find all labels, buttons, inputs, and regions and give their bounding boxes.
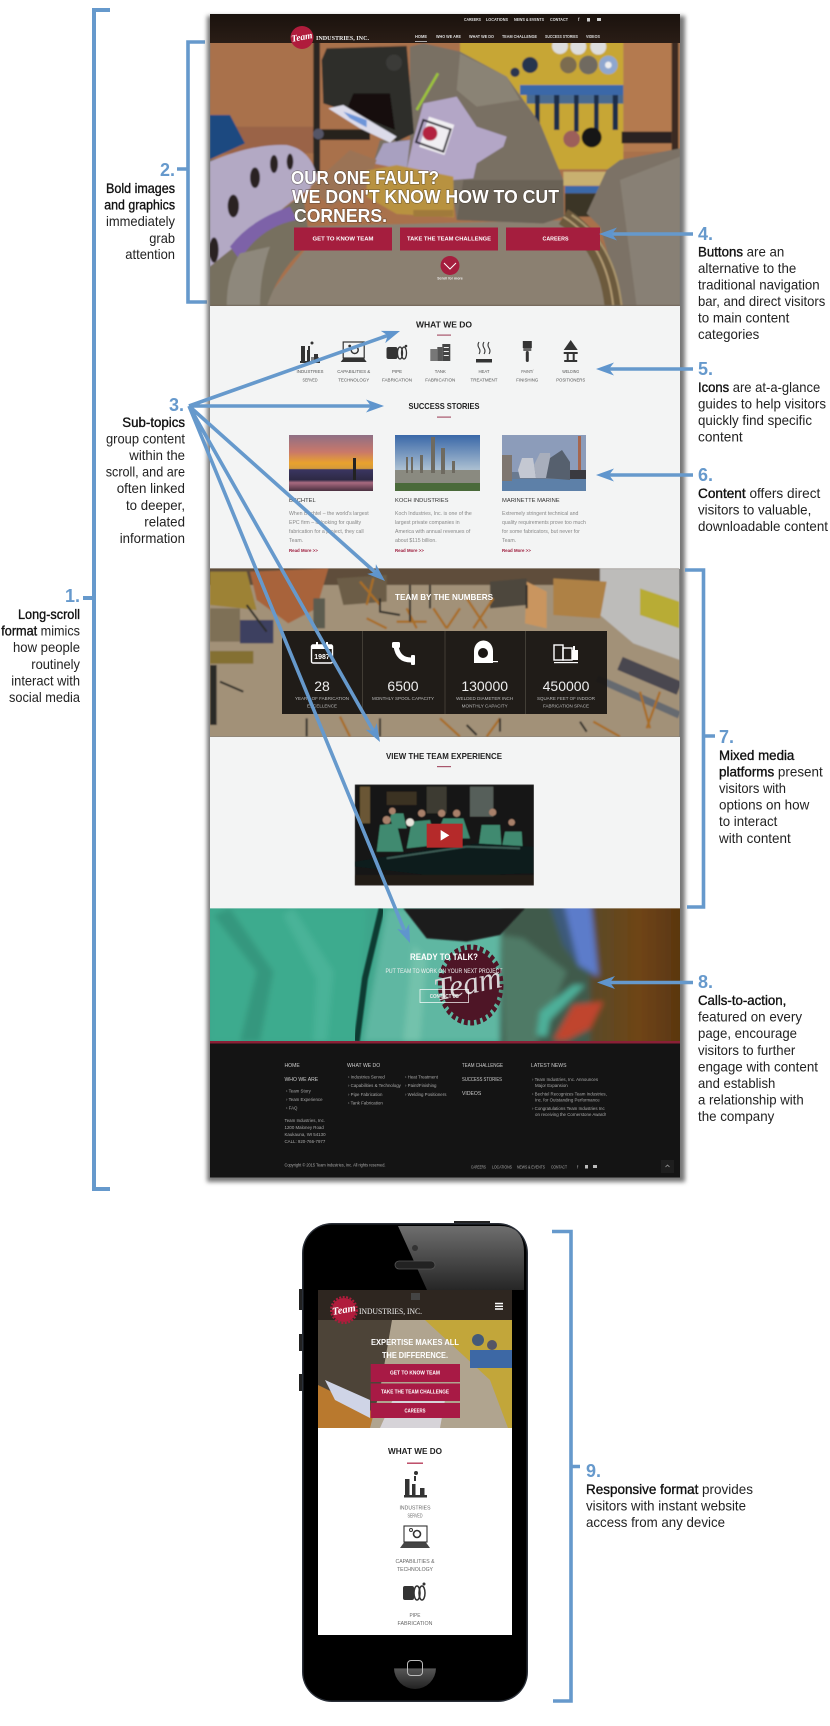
annotation 6: content: Content offers direct [698, 486, 821, 501]
story: Marinette [502, 435, 586, 553]
stats box: 6500 [387, 678, 419, 694]
mobile buttons: GET TO KNOW TEAM [390, 1370, 440, 1376]
footer column 2: › Industries Served [348, 1074, 385, 1080]
mobile hero photo [318, 1320, 512, 1428]
logo: INDUSTRIES, INC. [316, 36, 370, 42]
mobile header: Team [332, 1303, 357, 1318]
top utility nav: CAREERS [464, 17, 481, 22]
arrow 4 [599, 228, 693, 240]
footer column 2 [347, 1063, 447, 1106]
story: Bechtel: When Bechtel – the world's largest [289, 511, 369, 517]
icon labels: SERVED [302, 378, 318, 384]
footer column 2: › Tank Fabrication [348, 1100, 383, 1106]
annotation 5: icons: Icons are at-a-glance [698, 380, 820, 395]
annotation 5: icons: 5. [698, 359, 713, 379]
annotation 2: bold images: grab [149, 231, 175, 246]
annotation 6: content: visitors to valuable, [698, 502, 811, 518]
annotation 9: responsive: access from any device [586, 1515, 725, 1530]
icon labels: FINISHING [516, 378, 538, 384]
annotation 7: mixed media: with content [718, 831, 791, 846]
phone side buttons [299, 1221, 490, 1391]
panel: site header [210, 14, 680, 49]
mobile buttons: TAKE THE TEAM CHALLENGE [381, 1390, 449, 1396]
panel: team experience video [210, 737, 680, 909]
top utility nav: LOCATIONS [486, 17, 508, 22]
photo: ships [502, 435, 586, 491]
main nav: WHO WE ARE [436, 34, 461, 39]
icon labels: TECHNOLOGY [338, 378, 370, 384]
mobile headline: THE DIFFERENCE. [382, 1351, 448, 1360]
icon labels [296, 369, 586, 384]
annotation 8: calls to action: the company [698, 1109, 774, 1124]
heading: success stories: SUCCESS STORIES [408, 401, 480, 411]
heading: view the team experience: VIEW THE TEAM EXPERIENCE [386, 751, 502, 761]
annotation 4: buttons: traditional navigation [698, 278, 820, 292]
bracket 9: responsive [552, 1232, 580, 1701]
footer bottom bar: LOCATIONS [492, 1164, 512, 1170]
footer bottom bar: CONTACT [551, 1164, 567, 1170]
stats box: EXCELLENCE [307, 704, 337, 708]
annotation 5: icons: content [698, 430, 743, 444]
footer bottom bar: NEWS & EVENTS [517, 1164, 545, 1170]
annotation 7: mixed media: to interact [719, 814, 778, 829]
icon: industries [300, 342, 320, 363]
annotation 3: sub-topics: group content [106, 432, 185, 446]
footer bottom bar: f [577, 1164, 579, 1170]
icon: tape measure [474, 640, 498, 663]
footer column 2: › Pipe Fabrication [348, 1092, 383, 1097]
mobile label: pipe [398, 1613, 432, 1627]
heading: view the team experience [386, 751, 502, 767]
phone screen [318, 1290, 512, 1635]
story: Koch: about $115 billion. [395, 538, 437, 544]
icon labels: PIPE [392, 369, 403, 375]
mobile heading: what we do [388, 1446, 442, 1464]
annotation 4: buttons: bar, and direct visitors [698, 294, 825, 309]
stats box: MONTHLY CAPACITY [462, 704, 508, 708]
icon: brush [523, 341, 532, 362]
annotation 3: sub-topics: related [144, 514, 185, 530]
icon: elbow pipe [392, 642, 415, 665]
annotation 2: bold images: Bold images [106, 181, 175, 196]
arrow 8 [597, 976, 693, 989]
hero headline: CORNERS. [294, 205, 387, 226]
cta button: CONTACT US [430, 994, 459, 1000]
icon labels: PAINT/ [521, 369, 534, 375]
mobile label: pipe: PIPE [410, 1613, 421, 1619]
story: Bechtel: EPC firm – is looking for quality [289, 520, 361, 526]
annotation 1: long-scroll: social media [9, 690, 80, 705]
annotation 2: bold images [104, 160, 175, 262]
footer column 2: › Heat Treatment [405, 1074, 439, 1080]
main nav [415, 34, 600, 42]
top utility nav: f [578, 17, 580, 22]
scroll indicator: Scroll for more [437, 276, 463, 280]
annotation 4: buttons: 4. [698, 224, 713, 244]
footer column 1: HOME [284, 1063, 300, 1069]
footer column 1: WHO WE ARE [284, 1077, 319, 1083]
stats box: 130000 [461, 678, 508, 694]
arrow 6 [596, 468, 693, 482]
annotation 5: icons: guides to help visitors [698, 396, 826, 412]
annotation 6: content: 6. [698, 465, 713, 485]
story: Marinette: Extremely stringent technical and [502, 511, 579, 517]
annotation 8: calls to action: a relationship with [698, 1092, 804, 1108]
hero buttons [294, 228, 600, 250]
mobile icon: pipe [403, 1582, 426, 1600]
footer latest news: Major Expansion [535, 1083, 568, 1088]
heading: success stories [408, 401, 480, 418]
footer column 3: VIDEOS [462, 1091, 482, 1097]
footer column 2: › Paint/Finishing [405, 1083, 437, 1088]
annotation 4: buttons [698, 224, 825, 342]
annotation 7: mixed media [718, 727, 823, 846]
annotation 6: content: downloadable content [698, 519, 828, 534]
annotation 8: calls to action [698, 972, 818, 1124]
icon labels: FABRICATION [382, 378, 412, 384]
story: Bechtel: fabrication for a project, they call [289, 529, 364, 535]
annotation 4: buttons: categories [698, 327, 759, 342]
main nav: WHAT WE DO [469, 34, 494, 39]
photo: sunset [289, 435, 373, 491]
icon labels: HEAT [478, 369, 490, 375]
annotation 6: content [698, 465, 828, 534]
bracket 7: mixed media [685, 570, 715, 907]
mobile label: capabilities: TECHNOLOGY [397, 1567, 433, 1573]
annotation 3: sub-topics [106, 395, 185, 546]
hero buttons: TAKE THE TEAM CHALLENGE [407, 236, 491, 242]
annotation 7: mixed media: visitors with [719, 781, 786, 796]
annotation 8: calls to action: featured on every [698, 1010, 802, 1024]
main nav: HOME [415, 34, 427, 39]
annotation 9: responsive [586, 1461, 753, 1530]
icon: calendar: 1987 [314, 654, 330, 661]
annotation 2: bold images: and graphics [104, 198, 175, 212]
footer column 1: › Team Experience [286, 1097, 323, 1102]
seal: Team starburst [431, 948, 505, 1022]
logo: Team [291, 31, 313, 45]
annotation 5: icons: quickly find specific [698, 413, 812, 428]
heading: what we do: WHAT WE DO [416, 320, 472, 330]
icon labels: TANK [435, 369, 446, 375]
cta button [420, 990, 468, 1002]
story: Bechtel: Read More >> [289, 548, 318, 553]
icon: heat [476, 342, 492, 362]
story: Marinette: MARINETTE MARINE [502, 498, 560, 504]
annotation 2: bold images: 2. [160, 160, 175, 180]
annotation 9: responsive: Responsive format provides [586, 1482, 753, 1497]
footer column 3: TEAM CHALLENGE [462, 1063, 504, 1069]
annotation 2: bold images: attention [125, 247, 175, 262]
hero headline [291, 167, 560, 226]
footer column 2: WHAT WE DO [347, 1063, 380, 1069]
footer column 1: Team Industries, Inc. [284, 1118, 325, 1123]
icon: building [554, 645, 578, 663]
panel: hero photo [209, 38, 680, 307]
mobile headline [371, 1338, 459, 1360]
story: Koch: America with annual revenues of [395, 529, 471, 535]
annotation 1: long-scroll: interact with [11, 674, 80, 688]
icon row [296, 340, 586, 384]
annotation 1: long-scroll: how people [13, 640, 80, 655]
bracket 2: hero [177, 42, 207, 302]
mobile heading: what we do: WHAT WE DO [388, 1446, 442, 1456]
icon: positioner [564, 340, 578, 362]
annotation 8: calls to action: page, encourage [698, 1026, 797, 1041]
annotation 7: mixed media: platforms present [719, 764, 823, 780]
cta text: PUT TEAM TO WORK ON YOUR NEXT PROJECT [386, 969, 503, 975]
footer latest news: › Team Industries, Inc. Announces [532, 1077, 599, 1082]
annotation 1: long-scroll: format mimics [1, 624, 80, 638]
main nav: TEAM CHALLENGE [502, 34, 537, 39]
cta text [386, 952, 503, 975]
scroll indicator [437, 256, 463, 280]
hero buttons: CAREERS [542, 236, 569, 242]
icon labels: INDUSTRIES [296, 369, 324, 375]
top utility nav: NEWS & EVENTS [514, 17, 544, 22]
footer column 2: › Welding Positioners [405, 1092, 447, 1097]
story: Koch: largest private companies in [395, 520, 460, 526]
video thumbnail [355, 784, 534, 886]
footer latest news: › Bechtel Recognizes Team Industries, [532, 1092, 607, 1096]
story: Koch [395, 435, 480, 553]
photo: welder's teal shirt [210, 908, 680, 1041]
story: Bechtel: Team. [289, 538, 303, 544]
mobile buttons [371, 1364, 460, 1418]
stats box [282, 631, 607, 714]
story: Bechtel [289, 435, 373, 553]
annotation 4: buttons: Buttons are an [698, 244, 784, 260]
panel: what we do and success stories [210, 306, 680, 569]
icon: calendar [312, 642, 332, 663]
story: Koch: Read More >> [395, 548, 424, 553]
heading: team by the numbers: TEAM BY THE NUMBERS [395, 593, 494, 602]
annotation 2: bold images: immediately [106, 214, 175, 229]
phone home button [394, 1647, 436, 1689]
cta text: READY TO TALK? [410, 952, 478, 962]
seal: Team starburst: Team [431, 958, 505, 1008]
stats box: YEARS OF FABRICATION [295, 696, 349, 701]
hero buttons: GET TO KNOW TEAM [312, 236, 374, 242]
stats box: SQUARE FEET OF INDOOR [537, 696, 596, 701]
stats box: 28 [314, 678, 330, 694]
footer column 2: › Capabilities & Technology [348, 1083, 402, 1088]
icon: laptop [341, 342, 367, 362]
footer bottom bar: Copyright © 2015 Team Industries, Inc. All rights reserved. [284, 1162, 386, 1168]
play button [427, 824, 463, 848]
annotation 3: sub-topics: to deeper, [126, 498, 185, 513]
story: Marinette: Team. [502, 538, 516, 544]
panel: website mockup [193, 14, 693, 1178]
footer column 1: CALL: 920-766-7977 [284, 1139, 326, 1144]
annotation 7: mixed media: options on how [719, 798, 809, 812]
story: Bechtel: BECHTEL [289, 498, 317, 504]
footer latest news [531, 1063, 607, 1117]
story: Marinette: quality requirements prove too much [502, 520, 586, 526]
annotation 8: calls to action: and establish [698, 1076, 775, 1091]
hero headline: OUR ONE FAULT? [291, 167, 439, 188]
icon labels: TREATMENT [470, 378, 498, 384]
top utility nav: CONTACT [550, 17, 568, 22]
mobile label: pipe: FABRICATION [398, 1621, 432, 1627]
annotation 8: calls to action: 8. [698, 972, 713, 992]
story: Marinette: Read More >> [502, 548, 531, 553]
icon: pipe [386, 345, 407, 359]
footer column 1: › FAQ [286, 1106, 298, 1110]
footer column 1 [284, 1063, 326, 1144]
photo: fabrication shop [207, 565, 683, 742]
annotation 1: long-scroll [1, 586, 80, 705]
page shadow [207, 16, 685, 1182]
footer bottom bar [284, 1160, 674, 1173]
panel: call to action [210, 908, 680, 1041]
footer latest news: LATEST NEWS [531, 1063, 567, 1069]
mobile label: capabilities [396, 1559, 435, 1573]
icon labels: CAPABILITIES & [337, 369, 371, 375]
mobile label: industries: SERVED [408, 1514, 422, 1520]
annotation 8: calls to action: visitors to further [698, 1043, 796, 1058]
logo [290, 26, 370, 49]
annotation 4: buttons: to main content [698, 310, 790, 326]
mobile header: INDUSTRIES, INC. [359, 1307, 422, 1316]
annotation 8: calls to action: Calls-to-action, [698, 993, 786, 1008]
hero headline: WE DON'T KNOW HOW TO CUT [292, 186, 560, 207]
story: Marinette: for some fabricators, but never for [502, 529, 580, 535]
stats box: MONTHLY SPOOL CAPACITY [372, 696, 434, 701]
footer column 1: Kaukauna, WI 54130 [284, 1132, 326, 1137]
footer latest news: › Congratulations Team Industries Inc [532, 1106, 605, 1111]
stats box: WELDED DIAMETER INCH [456, 696, 513, 701]
story: Koch: KOCH INDUSTRIES [395, 498, 449, 504]
story: Koch: Koch Industries, Inc. is one of the [395, 511, 472, 517]
mobile icon: industries [404, 1471, 427, 1498]
annotation 8: calls to action: engage with content [698, 1060, 818, 1074]
annotation 3: sub-topics: information [120, 531, 185, 546]
footer latest news: on receiving the Cornerstone Award! [535, 1112, 606, 1117]
annotation 9: responsive: 9. [586, 1461, 601, 1481]
annotation 5: icons [698, 359, 826, 444]
annotation 7: mixed media: 7. [719, 727, 734, 747]
annotation 9: responsive: visitors with instant website [586, 1498, 746, 1514]
icon: tank [430, 344, 450, 361]
annotation 1: long-scroll: Long-scroll [18, 607, 80, 622]
stats box: FABRICATION SPACE [543, 704, 589, 708]
bracket 1: whole page [83, 10, 110, 1189]
phone speaker and camera [395, 1245, 435, 1269]
phone mockup [299, 1221, 528, 1702]
mobile label: capabilities: CAPABILITIES & [396, 1559, 435, 1565]
mobile label: industries: INDUSTRIES [400, 1506, 431, 1512]
annotation 1: long-scroll: routinely [31, 657, 80, 672]
panel: team by the numbers [207, 565, 683, 742]
annotation 3: sub-topics: 3. [169, 395, 184, 415]
panel: footer [210, 1041, 680, 1178]
mobile buttons: CAREERS [404, 1408, 426, 1414]
top utility nav [464, 17, 601, 22]
footer column 1: › Team Story [286, 1088, 312, 1094]
arrows: sub-topics [189, 325, 416, 945]
annotation 3: sub-topics: Sub-topics [122, 415, 185, 430]
footer column 1: 1200 Maloney Road [284, 1125, 324, 1130]
annotation 3: sub-topics: often linked [117, 481, 185, 496]
footer column 3: SUCCESS STORIES [462, 1077, 502, 1083]
heading: what we do [416, 320, 472, 336]
icon labels: WELDING [562, 369, 579, 375]
stats box: 450000 [543, 678, 590, 694]
annotation 3: sub-topics: within the [128, 448, 185, 463]
photo: refinery [395, 435, 480, 491]
footer bottom bar: CAREERS [471, 1164, 486, 1170]
main nav: SUCCESS STORIES [545, 34, 578, 39]
footer column 3 [462, 1063, 504, 1097]
icon labels: FABRICATION [425, 378, 456, 384]
main nav: VIDEOS [586, 34, 600, 39]
arrow 5 [596, 362, 693, 376]
annotation 7: mixed media: Mixed media [719, 748, 795, 763]
mobile label: industries [400, 1506, 431, 1520]
annotation 1: long-scroll: 1. [65, 586, 80, 606]
annotation 3: sub-topics: scroll, and are [106, 464, 185, 480]
mobile headline: EXPERTISE MAKES ALL [371, 1338, 459, 1347]
phone body [302, 1223, 528, 1702]
mobile header [318, 1290, 512, 1323]
mobile icon: laptop [400, 1526, 430, 1548]
footer latest news: Inc. for Outstanding Performance [535, 1098, 600, 1102]
icon labels: POSITIONERS [556, 378, 586, 384]
annotation 4: buttons: alternative to the [698, 261, 796, 276]
